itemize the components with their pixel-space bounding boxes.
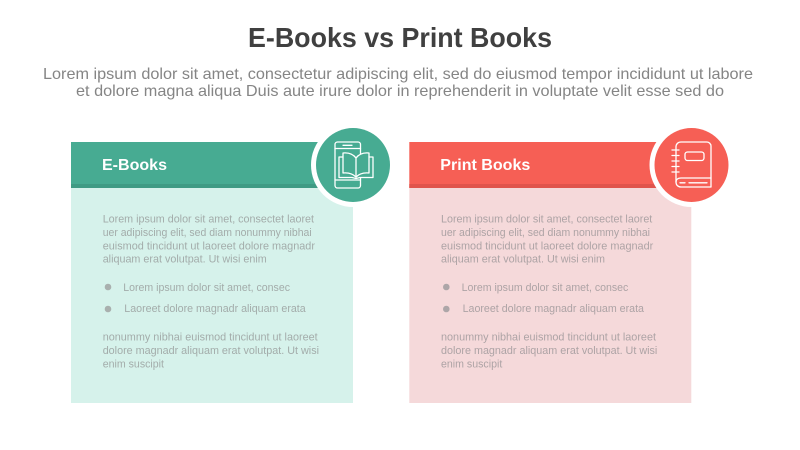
icon: phone with open book: [311, 123, 395, 207]
body text: print books closing: [441, 332, 657, 370]
subtitle text: Lorem ipsum dolor sit amet, consectetur adipiscing elit, sed do eiusmod tempor incididunt ut labore: [43, 66, 753, 83]
panel: print books: [409, 123, 734, 403]
bullet list: e-books: Laoreet dolore magnadr aliquam erata: [124, 303, 306, 315]
bullet list: print books: [443, 282, 645, 315]
body text: print books intro: [441, 214, 653, 266]
panel: e-books: [71, 123, 395, 403]
heading: e-books: E-Books: [102, 157, 167, 174]
body text: e-books intro: uer adipiscing elit, sed diam nonummy nibhai: [103, 227, 312, 239]
title: E-Books vs Print Books: [248, 22, 552, 53]
bullet list: e-books: Lorem ipsum dolor sit amet, consec: [123, 282, 290, 294]
header bar: e-books: [71, 142, 353, 188]
body text: print books intro: Lorem ipsum dolor sit amet, consectet laoret: [441, 214, 653, 226]
body text: e-books intro: [103, 214, 315, 266]
subtitle text: [43, 66, 753, 100]
bullet list: e-books: [105, 282, 306, 315]
panel body: e-books: [71, 186, 353, 403]
bullet list: print books: Laoreet dolore magnadr aliquam erata: [463, 303, 645, 315]
bullet list: print books: Lorem ipsum dolor sit amet, consec: [462, 282, 629, 294]
body text: e-books closing: enim suscipit: [103, 358, 165, 370]
body text: print books intro: aliquam erat volutpat. Ut wisi enim: [441, 254, 605, 266]
body text: e-books closing: nonummy nibhai euismod tincidunt ut laoreet: [103, 332, 318, 344]
body text: e-books closing: dolore magnadr aliquam erat volutpat. Ut wisi: [103, 345, 319, 357]
body text: e-books intro: aliquam erat volutpat. Ut wisi enim: [103, 254, 267, 266]
panel body: print books: [409, 186, 691, 403]
body text: print books closing: dolore magnadr aliquam erat volutpat. Ut wisi: [441, 345, 657, 357]
body text: print books intro: euismod tincidunt ut laoreet dolore magnadr: [441, 240, 653, 252]
body text: print books intro: uer adipiscing elit, sed diam nonummy nibhai: [441, 227, 650, 239]
subtitle text: et dolore magna aliqua Duis aute irure dolor in reprehenderit in voluptate velit esse sed do: [76, 83, 724, 100]
heading: print books: Print Books: [440, 157, 530, 174]
body text: e-books intro: Lorem ipsum dolor sit amet, consectet laoret: [103, 214, 315, 226]
icon: spiral notebook: [650, 123, 734, 207]
body text: print books closing: enim suscipit: [441, 358, 503, 370]
body text: print books closing: nonummy nibhai euismod tincidunt ut laoreet: [441, 332, 657, 344]
header bar: print books: [409, 142, 691, 188]
body text: e-books intro: euismod tincidunt ut laoreet dolore magnadr: [103, 240, 315, 252]
body text: e-books closing: [103, 332, 319, 370]
